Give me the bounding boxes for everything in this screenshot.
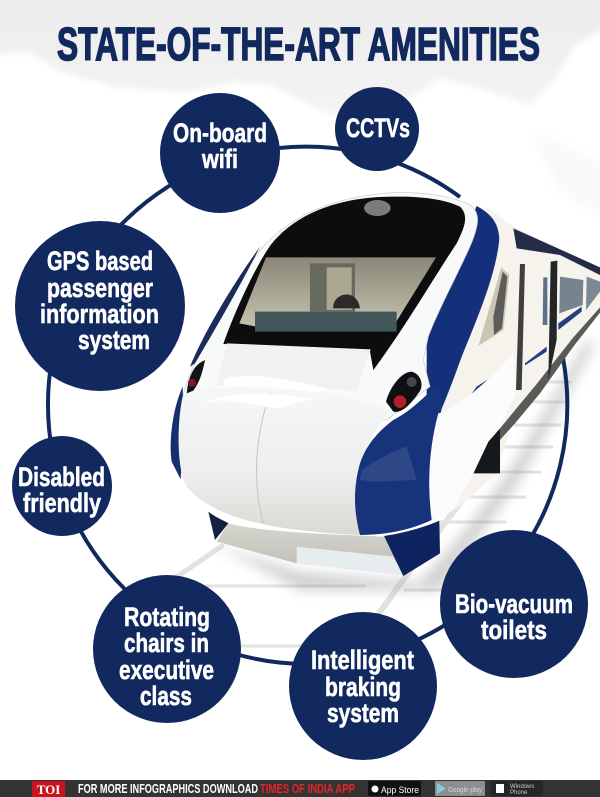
blue swoosh [427,206,499,443]
windshield dark surround [223,197,465,370]
amenity: bio-vacuum toilets [440,530,588,678]
bottom skirt blue [384,521,440,576]
App Store badge [368,781,421,796]
amenity: CCTVs [335,87,419,171]
bogie wheel [473,428,500,473]
amenity: on-board wifi [160,93,280,213]
amenity: GPS information system: GPS based [47,246,153,276]
amenity: disabled friendly [12,436,112,536]
Google Play badge [435,781,485,796]
white front frame [183,193,478,420]
amenity: intelligent braking: system [327,698,399,728]
amenity: disabled friendly: friendly [23,488,101,518]
amenity: GPS information system: passenger [47,273,153,303]
roof camera [364,200,391,216]
amenity: rotating chairs: chairs in [124,628,209,658]
amenity: intelligent braking [289,612,437,760]
left dark edge [190,247,260,367]
amenity: rotating chairs: Rotating [124,602,210,632]
ring connector line [48,147,567,664]
amenity: intelligent braking: Intelligent [311,645,414,675]
amenity: on-board wifi: On-board [173,118,267,148]
App Store badge: App Store [381,785,419,795]
windshield glass [239,257,436,330]
amenity: on-board wifi: wifi [201,144,238,174]
train [171,193,600,576]
amenity: GPS information system [15,221,185,391]
footer app name: TIMES OF INDIA APP [260,781,355,796]
blue lower flank [355,387,442,535]
left blue edge [171,387,183,479]
amenity: rotating chairs [93,575,241,723]
Google Play badge: Google play [448,787,482,794]
side windows and doors [457,261,600,415]
roof [513,228,600,275]
amenity: GPS information system: system [78,325,150,355]
train shadow [215,335,592,590]
carriage side [413,207,600,520]
bottom skirt left [208,512,228,540]
Windows Phone badge [491,781,543,796]
amenity: rotating chairs: class [140,681,192,711]
Windows Phone badge: Phone [510,790,528,796]
amenity: bio-vacuum toilets: toilets [481,615,547,645]
TOI logo [32,781,65,797]
white side skirt [429,353,516,518]
track and sleepers under the train [175,382,570,646]
amenity: CCTVs: CCTVs [346,113,410,143]
front nose [179,386,390,535]
amenity: rotating chairs: executive [119,655,214,685]
under-body [500,307,600,440]
amenity: disabled friendly: Disabled [18,462,105,492]
footer call to action: FOR MORE INFOGRAPHICS DOWNLOAD [78,781,258,796]
amenity: intelligent braking: braking [325,672,401,702]
amenity: GPS information system: information [40,299,159,329]
TOI logo: TOI [37,782,60,797]
front upper panel [217,343,371,391]
Windows Phone badge: Windows [510,784,534,790]
red signal lamp pod [386,372,422,412]
side lamp [187,360,205,393]
footer bar [0,780,600,797]
